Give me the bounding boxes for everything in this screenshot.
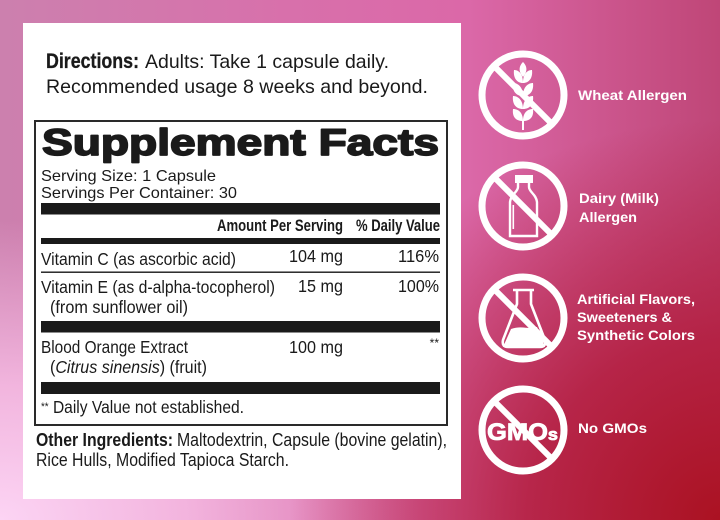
footnote: Daily Value not established.	[49, 397, 244, 417]
thick bar	[41, 382, 440, 394]
row: Blood Orange Extract: **	[430, 336, 439, 350]
row: Vitamin E: 15 mg	[298, 276, 343, 296]
row: Vitamin E: 100%	[398, 276, 439, 296]
other ingredients	[36, 430, 447, 470]
row: Blood Orange Extract: 100 mg	[289, 337, 343, 357]
row: Blood Orange Extract: Blood Orange Extract	[41, 337, 188, 357]
row: Vitamin E: Vitamin E (as d-alpha-tocopherol)	[41, 277, 275, 297]
row: Vitamin C: 104 mg	[289, 246, 343, 266]
label: Wheat Allergen: Wheat Allergen	[578, 88, 687, 103]
heading: Supplement Facts: Supplement Facts	[42, 122, 439, 163]
directions text	[46, 50, 428, 98]
column headers: % Daily Value	[356, 216, 440, 235]
row: Blood Orange Extract	[41, 336, 439, 377]
icon: no GMOs	[482, 389, 564, 471]
row: Vitamin C	[41, 246, 439, 269]
icon: no GMOs: GMOs	[487, 419, 558, 446]
row: Blood Orange Extract: (Citrus sinensis) (fruit)	[50, 357, 207, 377]
other ingredients: Other Ingredients:	[36, 430, 173, 450]
row: Vitamin C: 116%	[398, 246, 439, 266]
row: Vitamin E: (from sunflower oil)	[50, 297, 188, 317]
label: No GMOs: No GMOs	[578, 421, 647, 436]
row: Vitamin C: Vitamin C (as ascorbic acid)	[41, 249, 236, 269]
icon: no wheat	[482, 54, 564, 136]
other ingredients: Maltodextrin, Capsule (bovine gelatin),	[177, 430, 447, 450]
label: Dairy (Milk) Allergen: Allergen	[579, 210, 637, 225]
thick bar	[41, 203, 440, 214]
medium bar	[41, 238, 440, 244]
label: Dairy (Milk) Allergen: Dairy (Milk)	[579, 191, 659, 206]
row: Vitamin E	[41, 276, 439, 317]
label: Artificial Flavors, Sweeteners & Synthetic Colors: Artificial Flavors,	[577, 292, 695, 307]
directions text: Directions:	[46, 50, 139, 73]
serving info: Servings Per Container: 30	[41, 185, 237, 202]
thick bar	[41, 321, 440, 332]
icon: no dairy	[482, 165, 564, 247]
directions text: Adults: Take 1 capsule daily.	[145, 51, 389, 73]
label: Dairy (Milk) Allergen	[579, 191, 659, 225]
footnote: **	[41, 401, 49, 413]
column headers: Amount Per Serving	[217, 216, 343, 235]
serving info	[41, 168, 237, 202]
panel: white label	[23, 23, 461, 499]
directions text: Recommended usage 8 weeks and beyond.	[46, 76, 428, 98]
serving info: Serving Size: 1 Capsule	[41, 168, 216, 185]
label: Artificial Flavors, Sweeteners & Synthetic Colors	[577, 292, 695, 343]
supplement facts box	[35, 121, 447, 425]
icon: no artificial flask	[482, 277, 564, 359]
other ingredients: Rice Hulls, Modified Tapioca Starch.	[36, 450, 289, 470]
label: Artificial Flavors, Sweeteners & Synthetic Colors: Sweeteners &	[577, 310, 672, 325]
label: Artificial Flavors, Sweeteners & Synthetic Colors: Synthetic Colors	[577, 328, 695, 343]
